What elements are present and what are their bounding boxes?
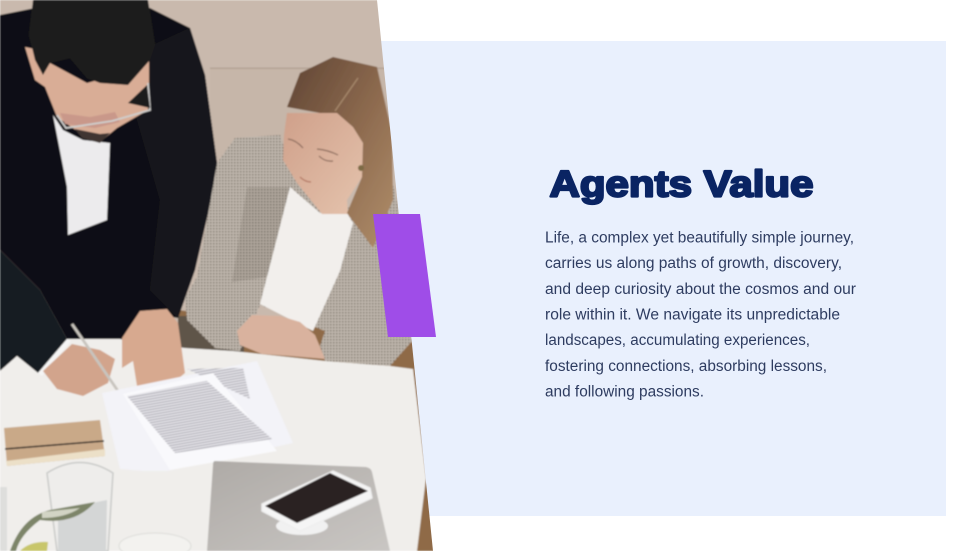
floor	[178, 310, 440, 551]
woman: jacket	[185, 135, 412, 366]
laptop	[207, 461, 390, 551]
woman: lapel	[232, 187, 290, 282]
table	[0, 339, 426, 551]
woman: hands	[237, 315, 325, 359]
text block: body paragraph: role within it. We navigate its unpredictable	[545, 306, 840, 324]
man: jacket	[0, 8, 218, 340]
wall	[0, 0, 412, 339]
accent: purple parallelogram	[373, 214, 436, 337]
panel: light blue background	[370, 41, 946, 516]
woman: facial features	[288, 139, 338, 182]
text block: body paragraph: carries us along paths of growth, discovery,	[545, 255, 842, 272]
woman: earring	[358, 165, 364, 171]
text block: body paragraph: landscapes, accumulating experiences,	[545, 332, 810, 349]
water glass	[0, 462, 191, 551]
text block: body paragraph: and following passions.	[545, 384, 704, 400]
man: hair	[29, 0, 155, 85]
text block: body paragraph: and deep curiosity about the cosmos and our	[545, 281, 856, 298]
man: flat hand	[122, 309, 185, 388]
notebook	[4, 420, 105, 466]
documents	[102, 361, 293, 471]
text block: body paragraph: Life, a complex yet beautifully simple journey,	[545, 230, 854, 246]
man: face	[25, 47, 149, 142]
plant leaves	[10, 502, 95, 551]
text block: body paragraph	[545, 230, 856, 400]
man: writing hand	[43, 344, 115, 396]
text block: body paragraph: fostering connections, absorbing lessons,	[545, 358, 827, 375]
pen	[72, 324, 118, 391]
man: glasses	[57, 83, 150, 128]
man: cuff	[38, 339, 71, 376]
man: shirt	[53, 115, 110, 235]
title: Agents Value	[550, 164, 814, 204]
photo: two colleagues reviewing documents	[0, 0, 440, 551]
woman: hair	[287, 57, 393, 248]
woman: shirt	[260, 187, 353, 331]
phone	[262, 471, 372, 531]
woman: face	[283, 113, 363, 214]
phone charger	[276, 520, 328, 536]
